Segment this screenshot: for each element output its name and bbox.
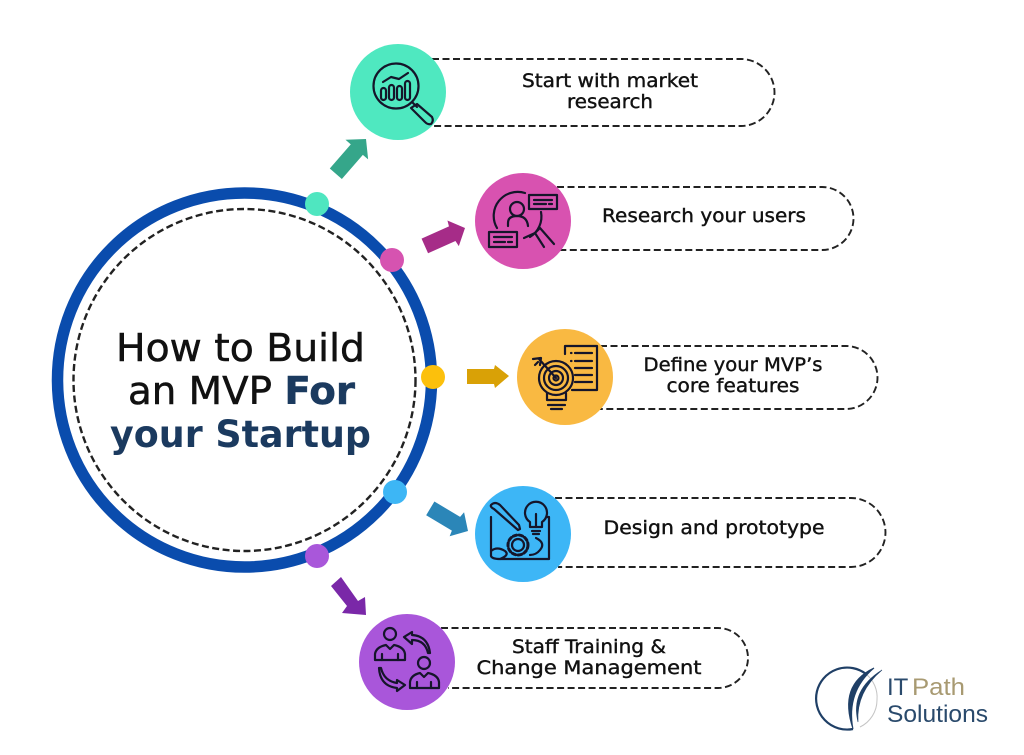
icon: logo swoosh	[816, 668, 882, 730]
connector dots on ring	[305, 192, 445, 568]
label: Change Management	[476, 657, 702, 679]
panel: step 1 market research	[350, 44, 774, 140]
label: Start with market	[522, 70, 698, 92]
panel: step 2 research users	[475, 173, 854, 269]
arrow: step 3	[467, 365, 509, 388]
logo: IT Path Solutions	[816, 668, 988, 730]
icon: blueprint with pencil, bulb and gear	[491, 502, 549, 559]
arrow: step 5	[331, 577, 366, 615]
title: How to Build	[116, 326, 365, 370]
arrow: step 1	[325, 129, 377, 184]
logo: IT Path Solutions: Path	[912, 674, 965, 701]
arrow: step 4	[423, 496, 475, 543]
icon: target bulb and checklist	[533, 346, 597, 409]
logo: IT Path Solutions: IT	[887, 674, 909, 701]
title: an MVP For	[128, 369, 355, 413]
icon: magnifier with chart	[374, 64, 433, 124]
icon: people exchange	[375, 628, 439, 691]
panel: step 5 staff training	[359, 614, 748, 710]
logo: IT Path Solutions: Solutions	[887, 701, 988, 728]
arrow: step 2	[419, 215, 471, 259]
title	[110, 326, 371, 456]
icon: user research	[489, 192, 557, 247]
label: Design and prototype	[604, 517, 824, 539]
label: core features	[666, 375, 800, 397]
panel: step 4 design and prototype	[475, 486, 885, 582]
label: Define your MVP’s	[644, 354, 822, 376]
label: Research your users	[602, 205, 806, 227]
panel: step 3 core features	[517, 329, 878, 425]
title: your Startup	[110, 413, 371, 456]
label: Staff Training &	[512, 636, 666, 658]
central circle with title	[58, 193, 432, 567]
label: research	[567, 91, 653, 113]
